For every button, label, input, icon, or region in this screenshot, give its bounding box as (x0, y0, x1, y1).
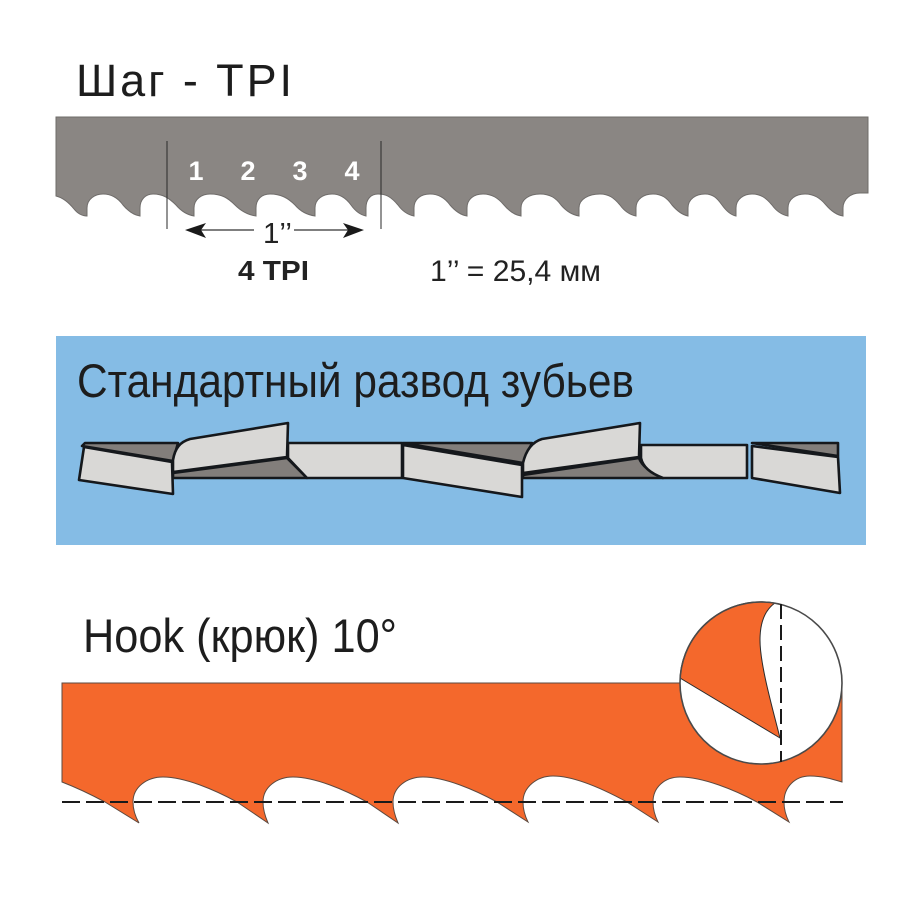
panel: standard tooth set (56, 336, 866, 545)
dark tooth faces (82, 443, 838, 478)
panel: hook tooth (62, 602, 843, 823)
panel: TPI pitch (56, 55, 868, 288)
tooth numbers: 4 (344, 156, 360, 186)
magnified tooth circle (680, 602, 842, 764)
tooth numbers: 1 (188, 156, 204, 186)
one-inch dimension arrow: 1’’ (263, 218, 292, 250)
tooth numbers (188, 156, 360, 186)
light teeth (79, 423, 840, 497)
blade top view diagram (79, 423, 840, 497)
tooth numbers: 3 (292, 156, 308, 186)
blue background (56, 336, 866, 545)
orange blade (62, 683, 842, 823)
tooth numbers: 2 (240, 156, 256, 186)
gray saw blade (56, 117, 868, 216)
heading: TPI: Шаг - TPI (76, 55, 292, 106)
label: 4 TPI: 4 TPI (238, 255, 309, 286)
heading: standard set: Стандартный развод зубьев (77, 354, 634, 407)
measurement tick lines (167, 141, 381, 229)
label: inch to mm: 1’’ = 25,4 мм (430, 255, 601, 288)
dashed reference line (62, 801, 843, 803)
heading: hook: Hook (крюк) 10° (83, 609, 397, 662)
one-inch dimension arrow (185, 218, 364, 250)
